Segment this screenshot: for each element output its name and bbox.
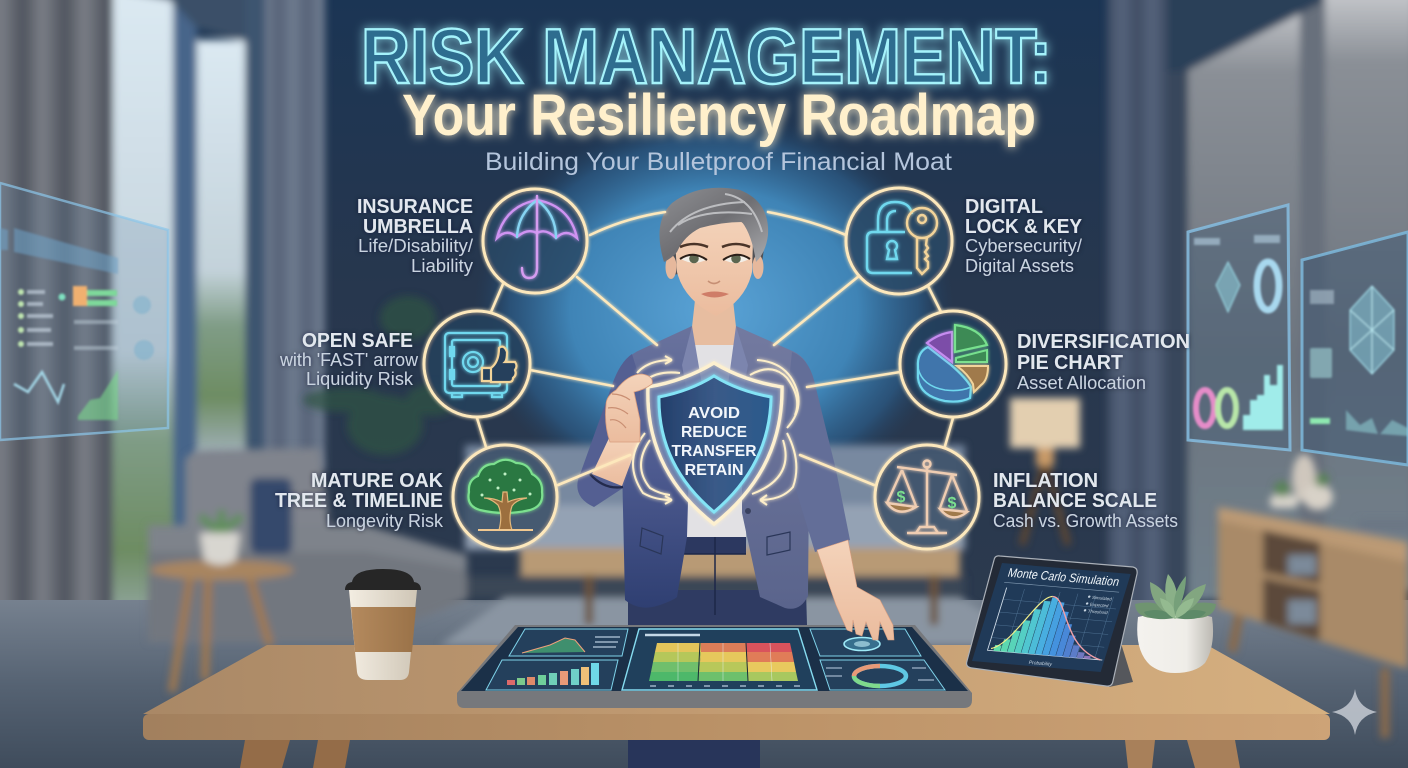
presenter: right forearm and hand <box>817 540 894 640</box>
leaves highlights <box>480 472 532 496</box>
pocket flaps <box>640 528 790 555</box>
dollar signs: $ <box>897 489 906 506</box>
thumbs up <box>482 347 516 382</box>
panel: area chart <box>509 629 628 656</box>
label: mature oak: Longevity Risk <box>326 511 444 531</box>
legend <box>1083 595 1113 615</box>
desk legs <box>240 740 290 768</box>
connector lines <box>477 212 953 485</box>
eyes <box>681 255 749 263</box>
side table <box>172 578 270 692</box>
lamp <box>1022 460 1068 545</box>
legend: Threshold <box>1087 609 1109 615</box>
icon node: oak tree <box>453 445 557 549</box>
icon node: insurance umbrella <box>483 189 587 293</box>
jacket left panel <box>620 326 692 608</box>
blue glow behind presenter <box>474 110 954 510</box>
indoor plant <box>303 296 458 455</box>
icon node: diversification pie chart <box>900 311 1006 417</box>
blurred furniture <box>148 296 1408 738</box>
jacket button <box>745 508 751 514</box>
label: inflation: Cash vs. Growth Assets <box>993 511 1178 531</box>
label: digital lock: LOCK & KEY <box>965 216 1083 238</box>
nose <box>708 281 720 284</box>
chart title: Monte Carlo Simulation <box>1006 566 1121 589</box>
blue slice <box>918 347 971 402</box>
green slices <box>955 325 987 352</box>
trousers <box>628 590 808 660</box>
panel: radial gauge <box>810 629 921 656</box>
presenter: head <box>660 188 768 316</box>
shield strategies text: RETAIN <box>684 462 744 479</box>
label: diversification: PIE CHART <box>1017 352 1123 374</box>
label: open safe: with 'FAST' arrow <box>279 350 419 370</box>
label: digital lock: Digital Assets <box>965 256 1074 276</box>
label: diversification <box>1017 331 1190 393</box>
left sofa <box>185 448 330 530</box>
label: digital lock: Cybersecurity/ <box>965 236 1082 256</box>
legend: Simulated <box>1091 595 1113 602</box>
padlock <box>867 202 912 273</box>
label: digital lock <box>965 196 1083 276</box>
coffee table <box>520 548 960 576</box>
label: open safe <box>279 330 419 389</box>
label: mature oak <box>275 470 444 531</box>
label: diversification: Asset Allocation <box>1017 373 1146 393</box>
left sleeve <box>577 354 640 507</box>
key <box>907 208 937 274</box>
label: inflation: BALANCE SCALE <box>993 490 1157 512</box>
stand <box>1109 640 1133 687</box>
legend: Expected <box>1089 602 1110 608</box>
lapels <box>682 326 748 410</box>
tan slice <box>957 366 988 392</box>
tagline: Building Your Bulletproof Financial Moat <box>485 148 952 176</box>
belt <box>684 537 746 554</box>
body <box>967 556 1137 686</box>
small plant left <box>200 510 242 533</box>
right sleeve <box>785 352 850 552</box>
distribution curve <box>991 593 1053 652</box>
desk <box>143 645 1330 768</box>
shield strategies text: TRANSFER <box>672 443 757 460</box>
trunk <box>484 492 527 530</box>
succulent plant <box>1135 574 1216 673</box>
shield strategies text <box>672 405 757 479</box>
label: mature oak: TREE & TIMELINE <box>275 490 443 512</box>
title: risk management: RISK MANAGEMENT: <box>361 12 1052 100</box>
histogram bars <box>993 594 1107 659</box>
ears <box>666 255 676 279</box>
ground <box>478 529 533 531</box>
shield inner <box>659 376 771 512</box>
scale frame <box>887 460 967 533</box>
neck <box>690 300 738 372</box>
label: digital lock: DIGITAL <box>965 196 1043 218</box>
coffee cup <box>345 569 421 680</box>
icon node: inflation balance scale <box>875 445 979 549</box>
label: insurance umbrella: UMBRELLA <box>363 216 473 238</box>
icon node: open safe <box>424 311 530 417</box>
circular arrows <box>633 356 799 505</box>
umbrella <box>497 196 577 278</box>
icon node: digital lock and key <box>846 188 952 294</box>
label: diversification: DIVERSIFICATION <box>1017 331 1190 353</box>
panel: donut chart <box>820 660 945 690</box>
subtitle: your resiliency roadmap: Your Resiliency Roadmap <box>402 83 1036 148</box>
hologram: right dashboard two <box>1302 232 1408 465</box>
label: insurance umbrella: Liability <box>411 256 473 276</box>
sleeve <box>351 607 416 652</box>
panel: risk heatmap <box>622 629 817 690</box>
rear sofa <box>465 445 965 550</box>
back hair <box>665 200 764 275</box>
label: insurance umbrella: Life/Disability/ <box>358 236 473 256</box>
presenter: lower body and jacket <box>577 300 850 768</box>
leaves <box>1135 574 1216 619</box>
lid <box>345 569 421 590</box>
left forearm <box>592 436 640 486</box>
monte carlo tablet <box>967 556 1137 687</box>
sparkle watermark <box>1332 689 1377 735</box>
safe <box>445 333 507 397</box>
hair fringe <box>660 188 768 262</box>
eyebrows <box>680 244 750 247</box>
label: mature oak: MATURE OAK <box>311 470 444 492</box>
left curtain <box>0 0 114 710</box>
hologram: right dashboard one <box>1188 205 1290 450</box>
canopy <box>468 460 542 513</box>
tablet bezel <box>457 625 972 708</box>
hologram: left wall dashboard <box>0 183 168 440</box>
right curtain <box>1107 0 1169 630</box>
label: inflation: INFLATION <box>993 470 1098 492</box>
white shirt <box>684 345 746 538</box>
label: inflation <box>993 470 1178 531</box>
vases on credenza <box>1292 454 1316 502</box>
label: insurance umbrella: INSURANCE <box>357 196 473 218</box>
face <box>675 214 753 316</box>
label: insurance umbrella <box>357 196 473 276</box>
jacket right panel <box>736 326 810 609</box>
panel: bar chart <box>486 660 618 690</box>
presenter: left hand <box>606 374 652 442</box>
central shield <box>633 356 799 524</box>
floor <box>0 600 1408 768</box>
icon node: inflation balance scale: $ <box>948 495 957 512</box>
screen <box>972 563 1131 672</box>
lips <box>701 292 729 298</box>
label: open safe: OPEN SAFE <box>302 330 413 352</box>
shield strategies text: REDUCE <box>681 424 747 441</box>
shield body <box>648 363 782 524</box>
shield strategies text: AVOID <box>688 405 740 422</box>
credenza <box>1232 610 1385 738</box>
purple slice <box>927 332 952 362</box>
axis label: Probability <box>1028 660 1053 668</box>
tablet dashboard <box>457 625 972 708</box>
label: open safe: Liquidity Risk <box>306 369 414 389</box>
